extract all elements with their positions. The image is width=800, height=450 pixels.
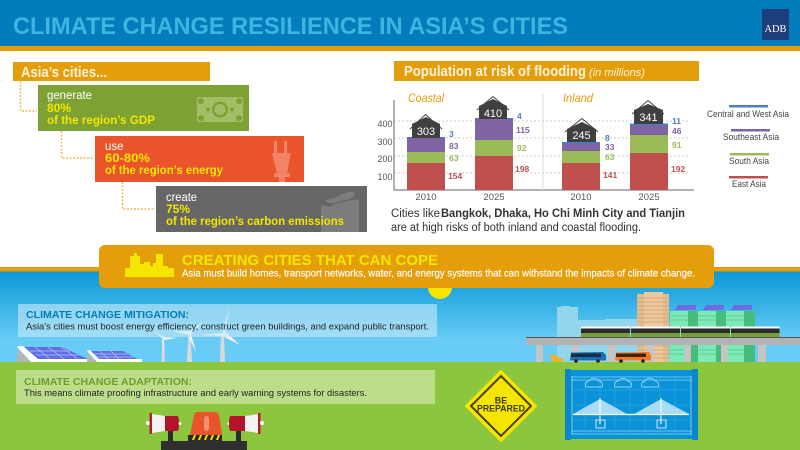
icon: be prepared sign: PREPARED: [477, 404, 525, 414]
heading: [394, 61, 699, 81]
panel: Asia's cities: [13, 62, 367, 232]
icon: bridge blueprint: [565, 369, 698, 440]
bar: coastal 2010: 83: [449, 141, 459, 151]
heading: (in millions): [589, 67, 645, 79]
icon: factory: [321, 199, 359, 232]
bar: coastal 2025: 2025: [483, 192, 505, 203]
panel: adaptation: [16, 370, 435, 404]
illustration: tan tower: [637, 292, 669, 362]
panel: mitigation: [18, 304, 437, 337]
illustration: orange bus: [615, 352, 651, 363]
bar: inland 2025: 46: [672, 126, 682, 136]
text: flooding note: Cities like: [391, 208, 440, 220]
card: GDP: 80%: [47, 101, 71, 115]
card: energy: 60-80%: [105, 151, 150, 165]
bar: coastal 2010: 2010: [415, 192, 437, 203]
bar: coastal 2025: 410: [484, 108, 502, 120]
stacked bar chart: 100: [377, 172, 393, 182]
icon: banknote: [197, 97, 243, 122]
illustration: blue bus: [570, 352, 606, 363]
card: carbon: [156, 186, 367, 232]
illustration: ghost skyline: [557, 306, 640, 362]
panel: population at risk of flooding: [377, 61, 790, 234]
panel: adaptation: This means climate proofing infrastructure and early warning systems for disasters.: [24, 388, 367, 399]
bar: coastal 2025: 115: [516, 125, 530, 135]
bar: inland 2010: 2010: [570, 192, 592, 203]
stacked bar chart: 300: [377, 137, 393, 147]
bar: inland 2025: 192: [671, 164, 685, 174]
icon: wind turbines: [153, 306, 240, 362]
bar: inland 2010: 8: [605, 133, 610, 143]
bar: coastal 2010: 303: [417, 126, 435, 138]
ADB logo: ADB: [764, 23, 786, 35]
bar: inland 2025: 341: [639, 112, 658, 124]
stacked bar chart: 200: [377, 154, 393, 164]
icon: skyline: [125, 253, 174, 277]
bar: inland 2025: 2025: [638, 192, 660, 203]
illustration: elevated train and viaduct: [526, 326, 800, 362]
stacked bar chart: Coastal: [408, 91, 444, 105]
text: flooding note: Bangkok, Dhaka, Ho Chi Minh City and Tianjin: [441, 208, 685, 220]
bar: inland 2025: [630, 100, 685, 203]
scene: sky: [0, 267, 800, 363]
bar: inland 2010: 33: [605, 142, 615, 152]
legend: Central and West Asia: [707, 109, 790, 120]
icon: be prepared sign: [466, 371, 536, 441]
bar: coastal 2010: [407, 114, 462, 203]
card: GDP: [38, 85, 249, 131]
card: carbon: of the region’s carbon emissions: [166, 214, 344, 228]
bar: coastal 2025: 4: [517, 111, 522, 121]
stacked bar chart: Inland: [563, 91, 593, 105]
legend: [707, 105, 790, 190]
legend: East Asia: [732, 179, 767, 190]
bar: inland 2010: 141: [603, 170, 617, 180]
icon: plug: [272, 141, 291, 182]
bar: inland 2010: 245: [572, 130, 591, 142]
bar: coastal 2025: 92: [517, 143, 527, 153]
bar: coastal 2010: 63: [449, 153, 459, 163]
card: energy: use: [105, 141, 124, 153]
bar: inland 2010: [562, 118, 617, 203]
panel: mitigation: Asia’s cities must boost energy efficiency, construct green buildings, and expand public transport.: [26, 322, 429, 332]
card: GDP: of the region’s GDP: [47, 113, 155, 127]
icon: sun: [428, 275, 452, 299]
bar: coastal 2010: 154: [448, 171, 462, 181]
bar: coastal 2025: [475, 96, 530, 203]
card: energy: of the region’s energy: [105, 163, 223, 177]
bar: coastal 2025: 198: [515, 164, 529, 174]
text: flooding note: [391, 208, 685, 234]
stacked bar chart: 400: [377, 119, 393, 129]
bar: inland 2025: 91: [672, 140, 682, 150]
heading: Population at risk of flooding: [404, 63, 586, 80]
legend: Southeast Asia: [723, 132, 780, 143]
panel: adaptation: CLIMATE CHANGE ADAPTATION:: [24, 377, 192, 388]
card: carbon: create: [166, 192, 197, 204]
icon: alarm and megaphones: [146, 412, 264, 450]
legend: South Asia: [729, 156, 770, 167]
stacked bar chart: [377, 91, 694, 203]
illustration: green buildings: [670, 305, 755, 362]
heading: creating cities: CREATING CITIES THAT CAN COPE: [182, 252, 438, 269]
ADB logo: [762, 9, 789, 40]
header band: [0, 0, 800, 51]
illustration: digger: [548, 355, 563, 362]
card: carbon: 75%: [166, 202, 190, 216]
bar: inland 2010: 63: [605, 152, 615, 162]
panel: mitigation: CLIMATE CHANGE MITIGATION:: [26, 310, 189, 321]
panel: creating cities that can cope: [99, 245, 714, 288]
icon: be prepared sign: BE: [495, 396, 507, 406]
card: GDP: generate: [47, 90, 92, 102]
heading: Asia's cities: [13, 62, 210, 81]
icon: solar panels: [17, 346, 142, 362]
text: flooding note: are at high risks of both inland and coastal flooding.: [391, 222, 641, 234]
panel: creating cities that can cope: Asia must build homes, transport networks, water, and energy systems that can withstand the impacts of climate change.: [182, 268, 695, 280]
heading: Asia's cities: Asia’s cities...: [21, 64, 107, 81]
card: energy: [95, 136, 304, 182]
bar: inland 2025: 11: [672, 116, 681, 126]
title: CLIMATE CHANGE RESILIENCE IN ASIA’S CITIES: [13, 13, 568, 40]
scene: ground: [0, 362, 800, 450]
bar: coastal 2010: 3: [449, 129, 454, 139]
